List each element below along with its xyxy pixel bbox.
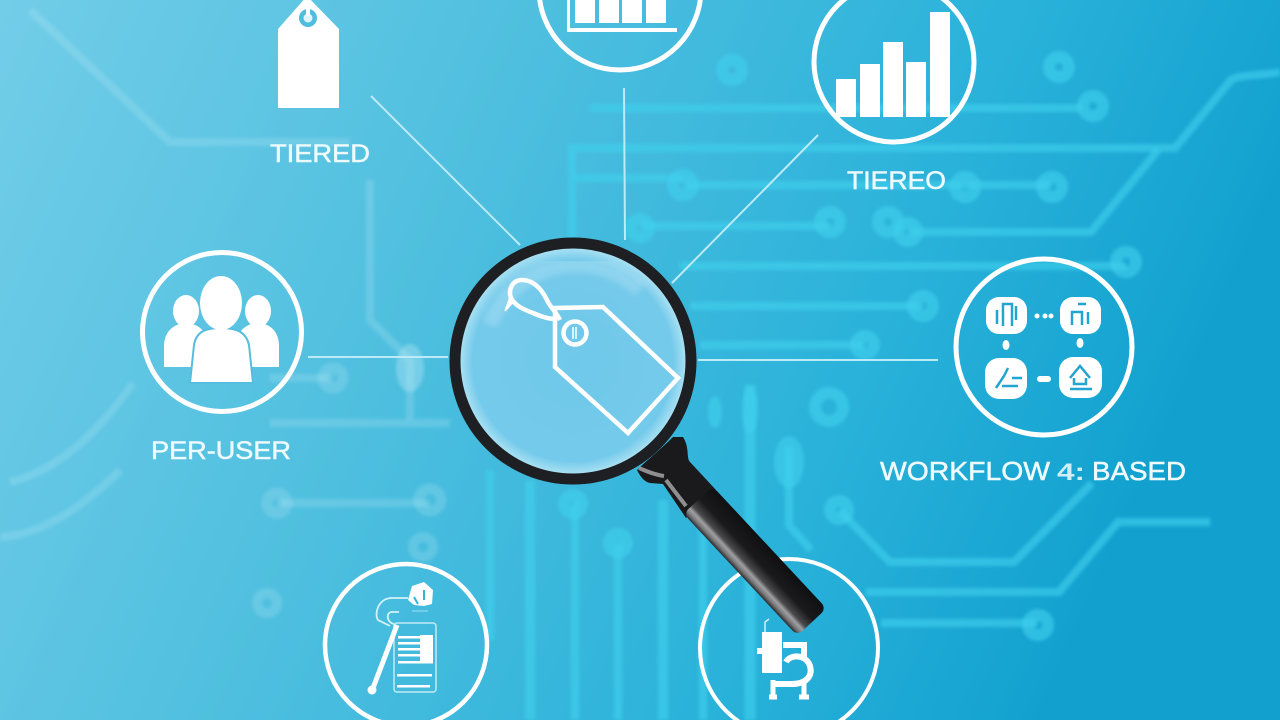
label: tiered: TIERED [270, 140, 370, 168]
icon ring [700, 559, 878, 720]
icon: price tag [278, 0, 339, 108]
connector lines [308, 88, 938, 360]
node: top bar chart [539, 0, 701, 70]
icon ring [956, 259, 1132, 435]
label: tiereo: TIEREO [847, 167, 946, 195]
lens [455, 243, 691, 479]
icon ring [325, 564, 487, 720]
icon ring [539, 0, 701, 70]
icon: bars [567, 0, 677, 32]
node: tiered price tag [270, 0, 370, 168]
node: tiered bar chart [814, 0, 974, 195]
icon ring [142, 252, 302, 412]
icon: machine [757, 619, 811, 697]
glyph: garbled 4: 4: [1057, 459, 1085, 486]
lens highlight [490, 265, 640, 325]
icon: bars [836, 12, 950, 117]
node: workflow-based: BASED [1092, 456, 1186, 486]
icon ring [814, 0, 974, 142]
node: per-user [142, 252, 302, 465]
label: per-user: PER-USER [151, 437, 291, 465]
icon: users [164, 276, 279, 383]
label: workflow based: WORKFLOW [880, 456, 1050, 486]
magnifying glass [455, 243, 827, 636]
node: bottom-left document [325, 564, 487, 720]
icon: workflow squares [985, 297, 1102, 399]
node: bottom-right machine [700, 559, 878, 720]
handle [637, 437, 827, 636]
icon: outlined tag [505, 280, 678, 433]
node: workflow-based [880, 259, 1186, 486]
icon: document and tool [368, 582, 436, 694]
